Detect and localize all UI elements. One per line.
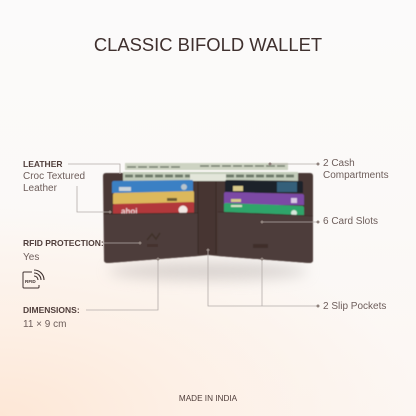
cash compartments label: 2 Cash — [323, 158, 355, 169]
leader dots — [108, 162, 320, 308]
left cards: ahoi — [121, 207, 137, 216]
slip pockets label: 2 Slip Pockets — [323, 301, 386, 312]
cash compartments label — [323, 158, 389, 181]
icon: RFID card: RFID — [25, 279, 36, 284]
red card — [113, 202, 194, 214]
leather heading: LEATHER — [23, 159, 63, 169]
cash compartments label: Compartments — [323, 170, 389, 181]
right cards — [224, 180, 304, 216]
left pocket — [104, 213, 198, 263]
card slots label: 6 Card Slots — [323, 216, 378, 227]
left cards — [112, 180, 194, 216]
stitching and logo — [104, 181, 313, 254]
made in india footer: MADE IN INDIA — [179, 394, 237, 403]
dimensions heading: DIMENSIONS: — [23, 305, 80, 315]
title: CLASSIC BIFOLD WALLET — [94, 34, 322, 55]
leather description: Leather — [23, 183, 57, 194]
wallet — [103, 163, 313, 263]
leather description: Croc Textured — [23, 171, 85, 182]
green card — [224, 203, 304, 215]
purple card — [224, 192, 304, 205]
centre spine — [198, 181, 216, 255]
leader lines — [68, 164, 318, 310]
blue card — [112, 180, 193, 193]
leather description — [23, 171, 85, 194]
wallet body — [103, 173, 313, 263]
wallet shadow — [108, 262, 308, 280]
yellow card — [113, 191, 194, 204]
icon: RFID card — [23, 270, 44, 288]
RFID value: Yes — [23, 252, 39, 263]
RFID heading: RFID PROTECTION: — [23, 238, 104, 248]
right pocket — [218, 212, 313, 263]
dimensions value: 11 × 9 cm — [23, 319, 66, 330]
black card — [225, 180, 303, 193]
banknotes — [123, 163, 298, 182]
